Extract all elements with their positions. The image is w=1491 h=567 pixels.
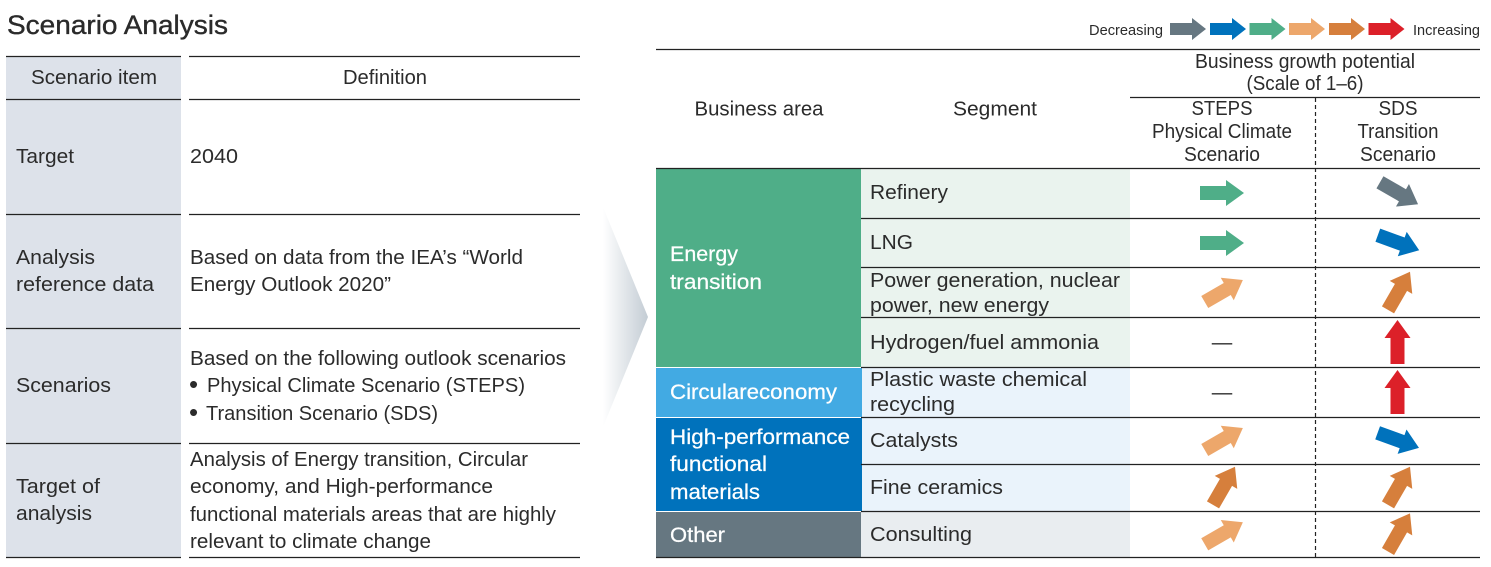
row: scenarios xyxy=(16,347,566,427)
row: target of analysis: functional materials areas that are highly xyxy=(190,503,557,526)
panel: scenario definition table xyxy=(6,56,580,558)
table header xyxy=(694,50,1438,166)
table header: Scenario item xyxy=(31,66,157,89)
table header: Business growth potential xyxy=(1195,50,1415,73)
segment tints xyxy=(861,168,1130,557)
row: target of analysis: relevant to climate change xyxy=(190,530,431,553)
table header: Scenario xyxy=(1184,143,1260,166)
table header: Business area xyxy=(694,98,824,120)
table header: STEPS xyxy=(1192,97,1252,120)
row: target of analysis xyxy=(16,448,557,553)
row: target of analysis: economy, and High-performance xyxy=(190,475,493,498)
segment labels: recycling xyxy=(870,393,955,416)
row: analysis reference data: reference data xyxy=(16,273,155,296)
arrows: STEPS scenario xyxy=(1198,180,1249,556)
row: analysis reference data: Based on data from the IEA’s “World xyxy=(190,246,523,269)
category labels: Energy xyxy=(670,242,738,266)
row: scenarios: Scenarios xyxy=(16,374,111,397)
table header xyxy=(31,66,427,89)
legend: Increasing xyxy=(1413,23,1480,39)
row: scenarios: Physical Climate Scenario (STEPS) xyxy=(207,374,525,397)
title: Scenario Analysis xyxy=(7,10,228,40)
row: target xyxy=(16,145,238,168)
segment labels: Fine ceramics xyxy=(870,476,1003,499)
row: target of analysis: Target of xyxy=(16,475,100,498)
table header: Transition xyxy=(1358,120,1438,143)
row: analysis reference data xyxy=(16,246,523,296)
table header: Segment xyxy=(953,98,1037,120)
table header: SDS xyxy=(1378,97,1418,120)
table header: Definition xyxy=(343,66,427,89)
segment labels: Hydrogen/fuel ammonia xyxy=(870,331,1100,354)
segment labels: Power generation, nuclear xyxy=(870,269,1120,292)
row: analysis reference data: Analysis xyxy=(16,246,95,269)
arrow: chevron linking panels xyxy=(603,207,648,427)
table header: (Scale of 1–6) xyxy=(1246,72,1364,95)
segment labels xyxy=(870,181,1120,546)
row: scenarios: Based on the following outlook scenarios xyxy=(190,347,566,370)
category labels: functional xyxy=(670,452,767,476)
segment labels: Plastic waste chemical xyxy=(870,368,1087,391)
segment labels: Refinery xyxy=(870,181,949,204)
table header: Scenario xyxy=(1360,143,1436,166)
category labels: materials xyxy=(670,480,760,504)
legend xyxy=(1089,18,1480,40)
segment labels: Catalysts xyxy=(870,429,958,452)
row: scenarios: Transition Scenario (SDS) xyxy=(206,402,438,425)
segment labels: Consulting xyxy=(870,523,972,546)
panel: business growth table xyxy=(656,50,1480,558)
row: scenarios: • xyxy=(189,369,198,399)
row: target: 2040 xyxy=(190,145,238,168)
category labels xyxy=(670,242,850,547)
table header: Physical Climate xyxy=(1152,120,1292,143)
row: target of analysis: Analysis of Energy transition, Circular xyxy=(190,448,528,471)
legend: Decreasing xyxy=(1089,23,1163,39)
arrows: STEPS scenario: — xyxy=(1212,381,1233,404)
arrows: STEPS scenario: — xyxy=(1212,331,1233,354)
left column background xyxy=(6,56,181,558)
row: analysis reference data: Energy Outlook 2020” xyxy=(190,273,391,296)
segment labels: LNG xyxy=(870,231,913,254)
category labels: transition xyxy=(670,270,762,294)
row: scenarios: • xyxy=(189,397,198,427)
arrows: SDS scenario xyxy=(1373,171,1425,558)
category labels: Circulareconomy xyxy=(670,380,837,404)
segment labels: power, new energy xyxy=(870,294,1050,317)
category labels: High-performance xyxy=(670,425,850,449)
category labels: Other xyxy=(670,523,725,547)
category blocks xyxy=(656,168,862,557)
row: target of analysis: analysis xyxy=(16,502,92,525)
row: target: Target xyxy=(16,145,74,168)
